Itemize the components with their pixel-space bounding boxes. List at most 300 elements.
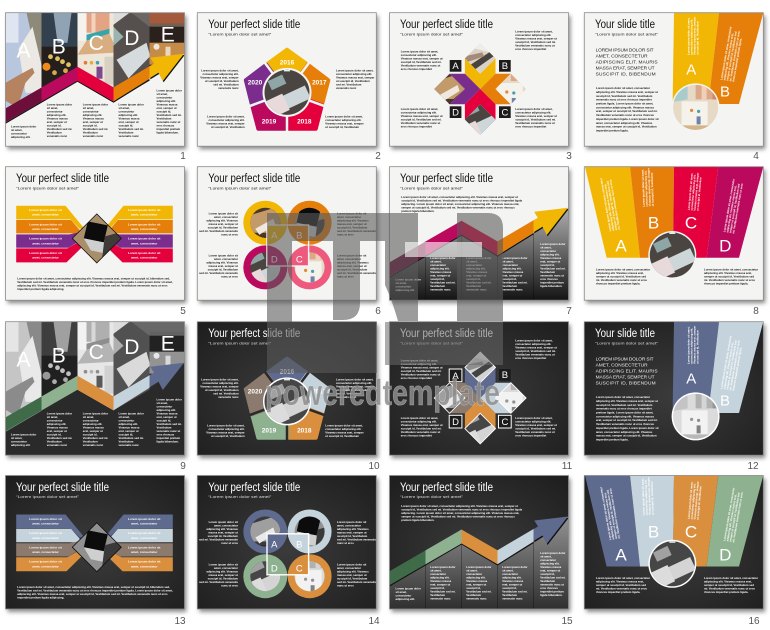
panel text: adipiscing elit. <box>502 266 522 270</box>
band D: Lorem ipsum dolor sit amet, consectetur <box>722 178 736 232</box>
column text: sit amet, <box>156 401 168 405</box>
body text: pretium ligula. Lorem ipsum dolor sit amet, <box>596 102 654 106</box>
side text: sed mi. Vestibulum <box>336 391 362 395</box>
column text: Vestibulum <box>156 425 172 429</box>
band A: consectetur adipiscing elit. <box>690 19 694 55</box>
column text: consectetur <box>83 418 100 422</box>
subtitle: “Lorem ipsum dolor set amet” <box>400 494 464 499</box>
column text: Vestibulum <box>47 130 62 134</box>
panel text: Vestibulum sed mi. <box>540 266 566 270</box>
corner text: Vestibulum venenatis nunc ut <box>401 372 440 376</box>
side text: massa erat, semper ut <box>337 531 367 535</box>
letters A to E: B <box>52 35 66 58</box>
column text: Lorem ipsum dolor <box>47 411 73 415</box>
band B: Lorem ipsum dolor sit amet, consectetur <box>719 25 733 80</box>
column text: ligula bibendum. <box>156 439 179 443</box>
side text: Lorem ipsum dolor sit amet, <box>336 68 374 72</box>
band A: ut suscipit id, Vestibulum <box>696 330 700 364</box>
pentagon chart <box>246 50 328 133</box>
title: Your slide title <box>595 19 655 31</box>
side text: Lorem ipsum dolor sit <box>337 520 366 524</box>
zigzag band <box>6 363 184 431</box>
corner text: consectetur adipiscing elit. <box>401 111 437 115</box>
side text: amet, consectetur <box>337 524 362 528</box>
side text: consectetur adipiscing elit. <box>325 118 362 122</box>
side text: suscipit id, Vestibulum <box>337 225 368 229</box>
body text: Lorem ipsum dolor sit amet, consectetur <box>596 86 651 90</box>
column text: Vivamus massa <box>47 116 68 120</box>
side text: consectetur adipiscing elit. <box>203 381 239 385</box>
column text: erat, semper ut <box>118 429 139 433</box>
column text: venenatis nunc <box>47 443 68 447</box>
panel text: ligula bibendum. <box>540 593 563 597</box>
side text: Lorem ipsum dolor sit amet, <box>336 377 374 381</box>
ribbons: Lorem ipsum dolor sit <box>128 560 160 564</box>
band B: Vivamus massa erat, semper <box>646 167 652 206</box>
column text: Lorem ipsum dolor <box>156 88 183 92</box>
column text: Vestibulum sed mi. <box>47 127 72 131</box>
side text: adipiscing elit. Vivamus <box>206 527 238 531</box>
bottom text: rhoncus imperdiet pretium ligula. <box>704 590 749 594</box>
panel text: adipiscing elit. <box>396 597 415 601</box>
band A: adipiscing elit. Vivamus massa erat, <box>603 183 615 231</box>
side text: amet, consectetur <box>337 566 362 570</box>
corner text: suscipit id, Vestibulum sed mi. <box>401 60 442 64</box>
band A: Vivamus massa erat, semper <box>693 16 697 55</box>
side text: ut suscipit id, Vestibulum <box>336 388 370 392</box>
band D: adipiscing elit. Vivamus massa erat, <box>725 494 738 542</box>
slide numbers: 6 <box>375 306 381 317</box>
panel text: erat, semper ut <box>466 274 486 278</box>
bottom text: semper ut suscipit id, Vestibulum sed <box>596 583 646 587</box>
band D: D <box>719 237 731 256</box>
column text: adipiscing elit. <box>83 422 102 426</box>
panel text: Lorem ipsum dolor <box>502 256 528 260</box>
column text: erat, semper ut <box>47 429 67 433</box>
side text: massa erat, semper ut <box>208 573 238 577</box>
ribbons: Lorem ipsum dolor sit <box>128 531 160 535</box>
panel text: erat, semper ut <box>430 582 450 586</box>
column text: adipiscing elit. <box>83 113 102 117</box>
intro text: adipiscing. Lorem ipsum dolor sit amet, consectetur adipiscing elit. Vivamus massa erat, <box>401 202 519 206</box>
column text: Vestibulum sed mi. <box>83 127 108 131</box>
panel text: consectetur <box>540 249 557 253</box>
subtitle: “Lorem ipsum dolor set amet” <box>595 340 659 345</box>
band A: semper ut suscipit id, Vestibulum sed <box>605 489 618 539</box>
capitals paragraph: SUSCIPIT ID, BIBENDUM <box>596 72 656 78</box>
column text: erat, semper ut <box>47 120 67 124</box>
band B: semper ut suscipit id, Vestibulum sed <box>725 31 738 81</box>
ribbons: amet, consectetur <box>32 522 60 526</box>
panel text: Vestibulum <box>540 270 556 274</box>
corner text: eros rhoncus imperdiet <box>401 67 432 71</box>
title: Your perfect slide title <box>400 482 493 494</box>
capitals paragraph: ADIPISCING ELIT. MAURIS <box>596 60 658 66</box>
body text: adipiscing elit. Vivamus massa erat, semper ut <box>596 399 658 403</box>
side text: adipiscing elit. Vivamus <box>337 527 369 531</box>
body text: imperdiet pretium ligula. <box>596 438 629 442</box>
capitals paragraph: MASSA ERAT, SEMPER UT <box>596 375 655 381</box>
corner text: Lorem ipsum dolor sit amet, <box>515 107 553 111</box>
subtitle: “Lorem ipsum dolor set amet” <box>208 340 272 345</box>
watermark text: poweredtemplate <box>265 372 500 413</box>
rings with photos: B <box>296 540 302 550</box>
side text: adipiscing elit. Vivamus <box>337 570 369 574</box>
body text: massa erat, semper ut suscipit id, Vestibulum <box>596 125 657 129</box>
column text: sit amet, <box>11 436 23 440</box>
bottom text: mi. Vestibulum venenatis nunc ut eros <box>704 587 755 591</box>
capitals paragraph: LOREM IPSUM DOLOR SIT <box>596 48 654 54</box>
bottom text: adipiscing elit. Vivamus massa erat, <box>596 271 644 275</box>
band D: Lorem ipsum dolor sit amet, consectetur <box>722 486 736 541</box>
side text: sed mi. Vestibulum venenatis <box>199 580 238 584</box>
intro text: pretium ligula bibendum. <box>401 518 435 522</box>
column text: adipiscing elit. <box>118 113 138 117</box>
panel text: imperdiet pretium <box>540 589 564 593</box>
panel text: erat, semper ut <box>430 274 450 278</box>
corner text: Lorem ipsum dolor sit amet, <box>515 416 553 420</box>
column text: adipiscing elit. <box>11 135 31 139</box>
ribbons: amet, consectetur <box>32 256 60 260</box>
column text: sit amet, <box>11 128 23 132</box>
corner text: Vivamus massa erat, semper ut <box>401 365 443 369</box>
column text: adipiscing elit. <box>118 422 138 426</box>
photo strip <box>6 322 184 434</box>
slide numbers <box>174 151 760 627</box>
side text: ut suscipit id, Vestibulum <box>205 79 239 83</box>
subtitle: “Lorem ipsum dolor set amet” <box>208 494 272 499</box>
capitals paragraph: ADIPISCING ELIT. MAURIS <box>596 369 658 375</box>
band B: Lorem ipsum dolor sit amet, consectetur <box>719 334 733 389</box>
side text: consectetur adipiscing elit. <box>336 381 372 385</box>
ribbons: Lorem ipsum dolor sit <box>128 251 160 255</box>
slide numbers: 16 <box>748 616 760 627</box>
corner text: Vestibulum venenatis nunc ut <box>515 430 555 434</box>
body text: consectetur adipiscing elit. Vivamus massa <box>596 414 654 418</box>
band A <box>673 13 719 104</box>
panel text: Vestibulum sed mi. <box>466 280 492 284</box>
ribbons: amet, consectetur <box>32 536 60 540</box>
side text: nunc ut eros <box>221 275 238 279</box>
letters A to E <box>16 333 175 371</box>
band B: B <box>648 214 659 233</box>
side text: consectetur adipiscing elit. <box>336 72 372 76</box>
side text: adipiscing elit. Vivamus <box>206 570 238 574</box>
side text: massa erat, semper ut <box>208 531 238 535</box>
panel text: venenatis nunc <box>502 288 523 292</box>
column text: Lorem ipsum dolor <box>118 102 145 106</box>
intro text: Lorem ipsum dolor sit amet, consectetur adipiscing elit. Vivamus massa erat, semper ut <box>401 504 518 508</box>
band B: rhoncus imperdiet pretium ligula. <box>731 38 743 82</box>
corner text: eros rhoncus imperdiet <box>515 434 546 438</box>
chevron cross: D <box>452 417 459 428</box>
panel text: sit amet, <box>396 281 407 285</box>
side text: Vivamus massa erat, semper <box>206 431 246 435</box>
bottom text: rhoncus imperdiet pretium ligula. <box>596 281 641 285</box>
bottom text: Lorem ipsum dolor sit amet, consectetur <box>704 267 759 271</box>
rings with photos: A <box>271 231 278 242</box>
column text: Vestibulum sed mi. <box>118 127 144 131</box>
side text: nunc ut eros <box>337 541 354 545</box>
letters A to E: E <box>161 24 175 47</box>
column text: sit amet, <box>83 106 94 110</box>
bottom text: Lorem ipsum dolor sit amet, consectetur adipiscing elit. Vivamus massa erat, semper ut suscipit id, bibendum sed, <box>17 585 170 589</box>
bottom text: imperdiet pretium ligula adipiscing. <box>17 596 65 600</box>
corner text: Vivamus massa erat, semper ut <box>401 114 443 118</box>
column text: Lorem ipsum dolor <box>156 397 183 401</box>
band A <box>673 322 719 413</box>
slide numbers: 10 <box>368 461 380 472</box>
band D: mi. Vestibulum venenatis nunc ut eros <box>731 183 744 234</box>
body text: massa erat, semper ut suscipit id, Vestibulum <box>596 434 657 438</box>
corner text: consectetur adipiscing elit. <box>515 342 551 346</box>
corner text: consectetur adipiscing elit. <box>401 362 437 366</box>
band D: semper ut suscipit id, Vestibulum sed <box>728 492 741 542</box>
side text: adipiscing elit. Vivamus <box>206 218 238 222</box>
band B: B <box>720 84 730 101</box>
side text: Vivamus massa erat, semper <box>325 122 365 126</box>
side text: Lorem ipsum dolor sit <box>209 254 238 258</box>
side text: sed mi. Vestibulum <box>213 391 239 395</box>
slide 11: dark cross of chevrons <box>390 322 570 459</box>
side text: massa erat, semper ut <box>208 222 238 226</box>
panel text: consectetur <box>430 572 447 576</box>
side text <box>200 68 375 129</box>
band C <box>673 476 718 566</box>
panel text: erat, semper ut <box>540 568 560 572</box>
body text: erat, semper ut suscipit id, Vestibulum sed mi. <box>596 109 658 113</box>
rings with photos: B <box>296 231 302 242</box>
title: Your perfect slide title <box>208 19 300 31</box>
side text: sed mi. Vestibulum venenatis <box>337 580 376 584</box>
panel text: Vivamus massa <box>502 270 524 274</box>
side text: sed mi. Vestibulum venenatis <box>337 538 376 542</box>
side text: suscipit id, Vestibulum <box>208 534 239 538</box>
subtitle: “Lorem ipsum dolor set amet” <box>208 185 272 190</box>
body text: Vestibulum venenatis nunc ut eros rhoncus <box>596 113 654 117</box>
panel text: suscipit id, <box>430 277 445 281</box>
column text: consectetur <box>83 109 100 113</box>
rings with photos: D <box>271 255 278 266</box>
corner text: Vestibulum venenatis nunc ut <box>515 121 555 125</box>
column text: suscipit id, <box>156 109 171 113</box>
corner text <box>401 338 557 438</box>
corner text: consectetur adipiscing elit. <box>515 420 551 424</box>
body text: amet, consectetur adipiscing elit. Vivamus <box>596 430 653 434</box>
slide numbers: 5 <box>180 306 186 317</box>
panel text: Vestibulum <box>502 593 518 597</box>
subtitle: “Lorem ipsum dolor set amet” <box>208 31 272 36</box>
slide 7: rising arrow with dark panels <box>390 167 570 303</box>
panel text: Lorem ipsum dolor <box>466 256 492 260</box>
slide numbers: 4 <box>753 151 759 162</box>
column text: Lorem ipsum dolor <box>83 411 109 415</box>
column text: Vestibulum <box>118 439 134 443</box>
bottom text: adipiscing elit. Vivamus massa erat, <box>704 271 752 275</box>
corner text: Vivamus massa erat, semper ut <box>515 114 557 118</box>
corner text: Vestibulum venenatis nunc ut <box>401 430 440 434</box>
column text: consectetur <box>118 418 135 422</box>
band B <box>630 167 674 258</box>
zigzag band <box>6 54 185 123</box>
panel text: adipiscing elit. <box>466 266 486 270</box>
side text: suscipit id, Vestibulum <box>337 576 368 580</box>
column text: Vivamus massa <box>118 425 140 429</box>
slide 8: four band fan <box>584 167 765 303</box>
side text: ut suscipit id, Vestibulum <box>325 125 360 129</box>
band C: ut suscipit id, Vestibulum <box>696 177 703 211</box>
corner text: eros rhoncus imperdiet <box>401 376 432 380</box>
bottom text: mi. Vestibulum venenatis nunc ut eros <box>704 278 755 282</box>
band D: D <box>719 546 731 564</box>
column text: suscipit id, <box>47 432 62 436</box>
corner text: Vestibulum venenatis nunc ut <box>401 121 440 125</box>
column text: suscipit id, <box>118 123 133 127</box>
corner text: Vestibulum venenatis nunc ut <box>401 63 440 67</box>
slide 9: dark zigzag with grey photos <box>6 322 186 458</box>
bottom text: rhoncus imperdiet pretium ligula. <box>596 590 641 594</box>
bottom text: rhoncus imperdiet pretium ligula. <box>704 281 749 285</box>
column text: ligula bibendum. <box>156 130 179 134</box>
letters A to E: C <box>89 341 104 364</box>
column text: Vivamus massa <box>83 116 104 120</box>
bottom text: imperdiet pretium ligula adipiscing. <box>17 287 65 291</box>
ribbons: Lorem ipsum dolor sit <box>29 208 62 212</box>
column text: consectetur <box>156 95 173 99</box>
band A: A <box>615 546 627 564</box>
side text: Lorem ipsum dolor sit amet, <box>201 377 239 381</box>
ribbons: amet, consectetur <box>131 241 158 245</box>
corner text: eros rhoncus imperdiet <box>515 356 546 360</box>
column text: sit amet, <box>156 92 168 96</box>
slide numbers: 15 <box>561 616 573 627</box>
bottom text: Vestibulum sed mi. Vestibulum venenatis nunc ut eros rhoncus imperdiet pretium ligula. Lorem ipsum dolor sit amet, <box>17 280 173 284</box>
corner text: eros rhoncus imperdiet <box>515 125 546 129</box>
body text: suscipit id, Vestibulum sed mi. Vestibulum <box>596 94 653 98</box>
panel text: sit amet, <box>396 590 407 594</box>
column text: imperdiet pretium <box>156 436 181 440</box>
corner text: suscipit id, Vestibulum sed mi. <box>515 349 556 353</box>
column text: Vestibulum sed mi. <box>156 422 182 426</box>
bottom text: Lorem ipsum dolor sit amet, consectetur <box>596 576 651 580</box>
band B: consectetur adipiscing elit. <box>644 170 649 207</box>
panel text: Vestibulum sed mi. <box>430 280 456 284</box>
panel text: Lorem ipsum dolor <box>396 586 422 590</box>
pentagon chart: 2020 <box>248 80 263 87</box>
panel text: venenatis nunc <box>502 596 523 600</box>
corner text: Lorem ipsum dolor sit amet, <box>401 49 438 53</box>
column text: adipiscing elit. <box>156 408 176 412</box>
side text: Vivamus massa erat, semper <box>336 75 375 79</box>
column text: sit amet, <box>118 106 130 110</box>
panel text: Lorem ipsum dolor <box>466 565 492 569</box>
side text: Lorem ipsum dolor sit amet, <box>207 115 245 119</box>
subtitle: “Lorem ipsum dolor set amet” <box>400 340 464 345</box>
bottom text: adipiscing elit. Vivamus massa erat, semper ut suscipit id, Vestibulum sed mi. Vestibulum venenatis nunc ut eros <box>17 283 168 287</box>
side text: nunc ut eros <box>221 541 238 545</box>
side text: nunc ut eros <box>221 584 238 588</box>
photo strip <box>6 13 184 125</box>
letters A to E: B <box>52 344 66 367</box>
ribbons: Lorem ipsum dolor sit <box>128 208 160 212</box>
column text <box>11 88 183 139</box>
column text: Vivamus massa <box>83 425 104 429</box>
slide 10: dark pentagon years <box>197 322 378 458</box>
side text: sed mi. Vestibulum venenatis <box>199 271 238 275</box>
corner text: suscipit id, Vestibulum sed mi. <box>515 40 556 44</box>
panel text: Vestibulum sed mi. <box>540 575 566 579</box>
column text: eros rhoncus <box>156 123 175 127</box>
column text: suscipit id, <box>83 123 98 127</box>
side text: sed mi. Vestibulum venenatis <box>199 229 238 233</box>
ribbons: Lorem ipsum dolor sit <box>29 545 62 549</box>
band B: adipiscing elit. Vivamus massa erat, <box>722 33 735 81</box>
corner text: consectetur adipiscing elit. <box>401 53 437 57</box>
band B: Lorem ipsum dolor sit amet, <box>640 478 646 516</box>
band B: mi. Vestibulum venenatis nunc ut eros <box>728 339 741 391</box>
column text: suscipit id, <box>118 432 133 436</box>
column text: Lorem ipsum dolor <box>11 432 37 436</box>
panel text: Vestibulum sed mi. <box>430 589 456 593</box>
body text: imperdiet pretium ligula. Lorem ipsum dolor sit <box>596 426 659 430</box>
side text: massa erat, semper ut <box>208 264 238 268</box>
intro text: suscipit id, Vestibulum sed mi. Vestibulum venenatis nunc ut eros rhoncus imperdiet ligula <box>401 507 523 511</box>
rings with photos: C <box>296 255 303 266</box>
rings with photos: D <box>271 564 278 574</box>
side text: ut suscipit id, Vestibulum <box>211 125 245 129</box>
side text: Lorem ipsum dolor sit <box>209 562 238 566</box>
band C: Vivamus massa erat, semper <box>693 171 700 211</box>
column text: Vestibulum <box>118 130 134 134</box>
side text <box>200 377 375 438</box>
pentagon chart <box>246 359 328 442</box>
side text: suscipit id, Vestibulum <box>208 576 239 580</box>
rings with photos <box>243 200 332 290</box>
side text: nunc ut eros <box>337 275 354 279</box>
column text: Lorem ipsum dolor <box>11 124 37 128</box>
side text: adipiscing elit. Vivamus <box>206 261 238 265</box>
side text: venenatis nunc <box>336 86 357 90</box>
panel text: Vivamus massa <box>540 565 562 569</box>
slide 15: dark rising arrow <box>390 476 570 612</box>
bottom text: Vestibulum sed mi. Vestibulum venenatis nunc ut eros rhoncus imperdiet pretium ligula. Lorem ipsum dolor sit amet, <box>17 589 173 593</box>
panel text: adipiscing elit. <box>502 575 522 579</box>
round photo <box>648 231 696 278</box>
column text: venenatis nunc <box>47 134 68 138</box>
ribbons: Lorem ipsum dolor sit <box>29 531 62 535</box>
capitals paragraph: LOREM IPSUM DOLOR SIT <box>596 357 654 363</box>
band A: Vivamus massa erat, semper <box>693 325 697 364</box>
panel text: Lorem ipsum dolor <box>430 256 456 260</box>
band A: Lorem ipsum dolor sit amet, consectetur <box>599 486 612 540</box>
ribbons: amet, consectetur <box>32 213 60 217</box>
bottom text: mi. Vestibulum venenatis nunc ut eros <box>596 587 647 591</box>
side text: amet, consectetur <box>214 257 239 261</box>
corner text: Vivamus massa erat, semper ut <box>515 345 557 349</box>
capitals paragraph: AMET, CONSECTETUR <box>596 54 648 60</box>
corner text: consectetur adipiscing elit. <box>401 420 437 424</box>
ribbons: Lorem ipsum dolor sit <box>128 517 160 521</box>
side text: Lorem ipsum dolor sit amet, <box>207 424 245 428</box>
ribbons: amet, consectetur <box>32 550 60 554</box>
column text: Lorem ipsum dolor <box>83 102 109 106</box>
panel text: erat, semper ut <box>466 582 486 586</box>
band A: adipiscing elit. Vivamus massa erat, <box>603 492 615 540</box>
panel text: suscipit id, <box>466 277 481 281</box>
pentagon chart: 2017 <box>312 389 327 396</box>
corner text: Vivamus massa erat, semper ut <box>515 423 557 427</box>
side text: Vivamus massa erat, semper <box>206 122 246 126</box>
